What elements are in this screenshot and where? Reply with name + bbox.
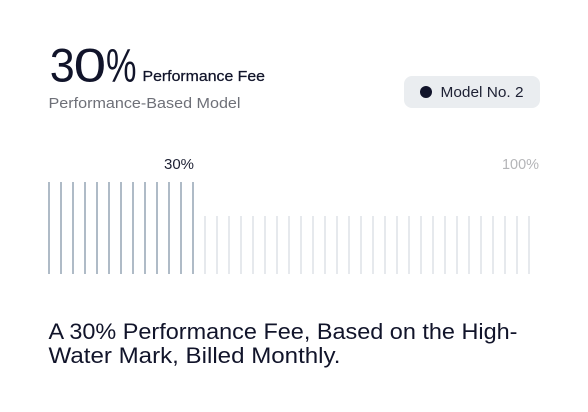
- bar chart: filled ticks to 30%: [48, 182, 194, 274]
- badge: Model No. 2: [404, 76, 540, 108]
- heading: 30% Performance Fee: Performance Fee: [142, 69, 265, 85]
- bar chart: remaining ticks to 100%: [204, 216, 530, 274]
- description text: Water Mark, Billed Monthly.: [48, 343, 340, 368]
- label: 100%: 100%: [502, 157, 539, 173]
- heading: 30% Performance Fee: 3: [50, 38, 75, 92]
- heading: 30% Performance Fee: [50, 38, 265, 92]
- heading: 30% Performance Fee: %: [106, 38, 136, 92]
- description text: [48, 319, 518, 368]
- badge: Model No. 2: Model No. 2: [440, 84, 524, 101]
- heading: 30% Performance Fee: 0: [74, 38, 106, 92]
- description text: A 30% Performance Fee, Based on the High-: [48, 319, 518, 344]
- subheading: Performance-Based Model: [48, 95, 240, 112]
- label: 30%: 30%: [164, 157, 194, 173]
